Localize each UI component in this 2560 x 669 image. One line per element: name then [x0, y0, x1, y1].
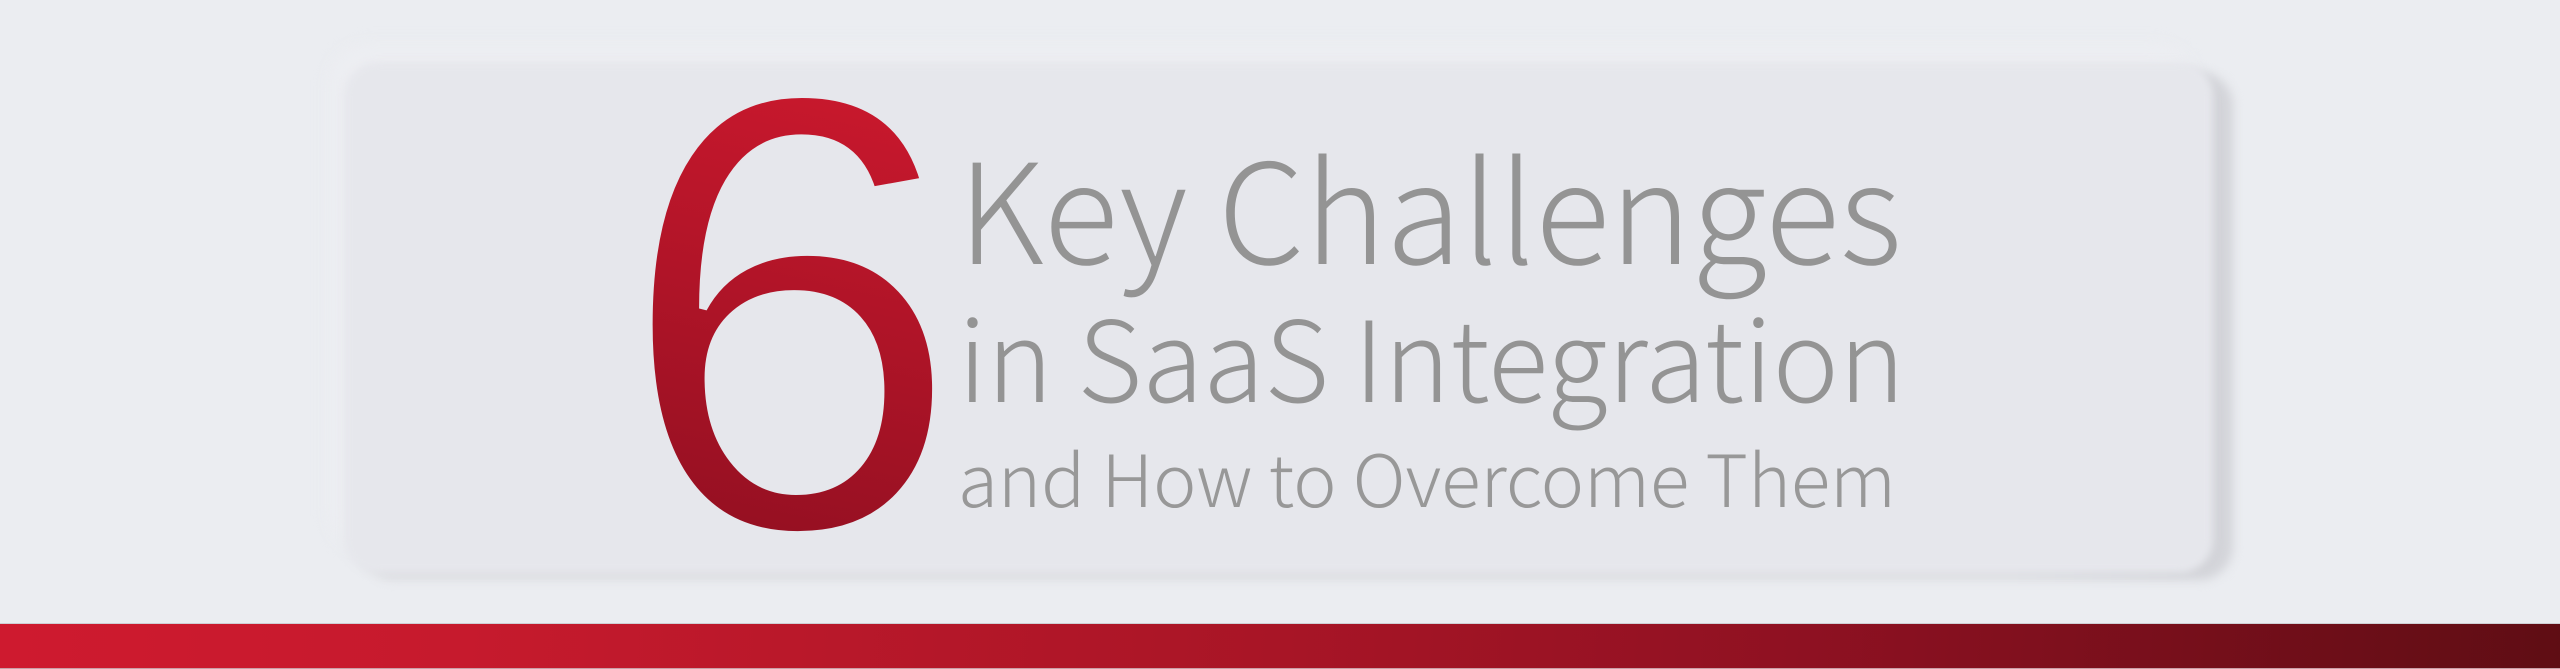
heading line: Key Challenges: Key Challenges	[958, 104, 1902, 305]
panel: title card	[344, 62, 2213, 573]
subheading: and How to Overcome Them: and How to Overcome Them	[958, 423, 1896, 528]
card shadow	[360, 72, 2233, 580]
bottom gradient bar	[0, 624, 2560, 668]
card highlight	[332, 48, 2192, 548]
heading line: in SaaS Integration: in SaaS Integration	[958, 273, 1905, 435]
